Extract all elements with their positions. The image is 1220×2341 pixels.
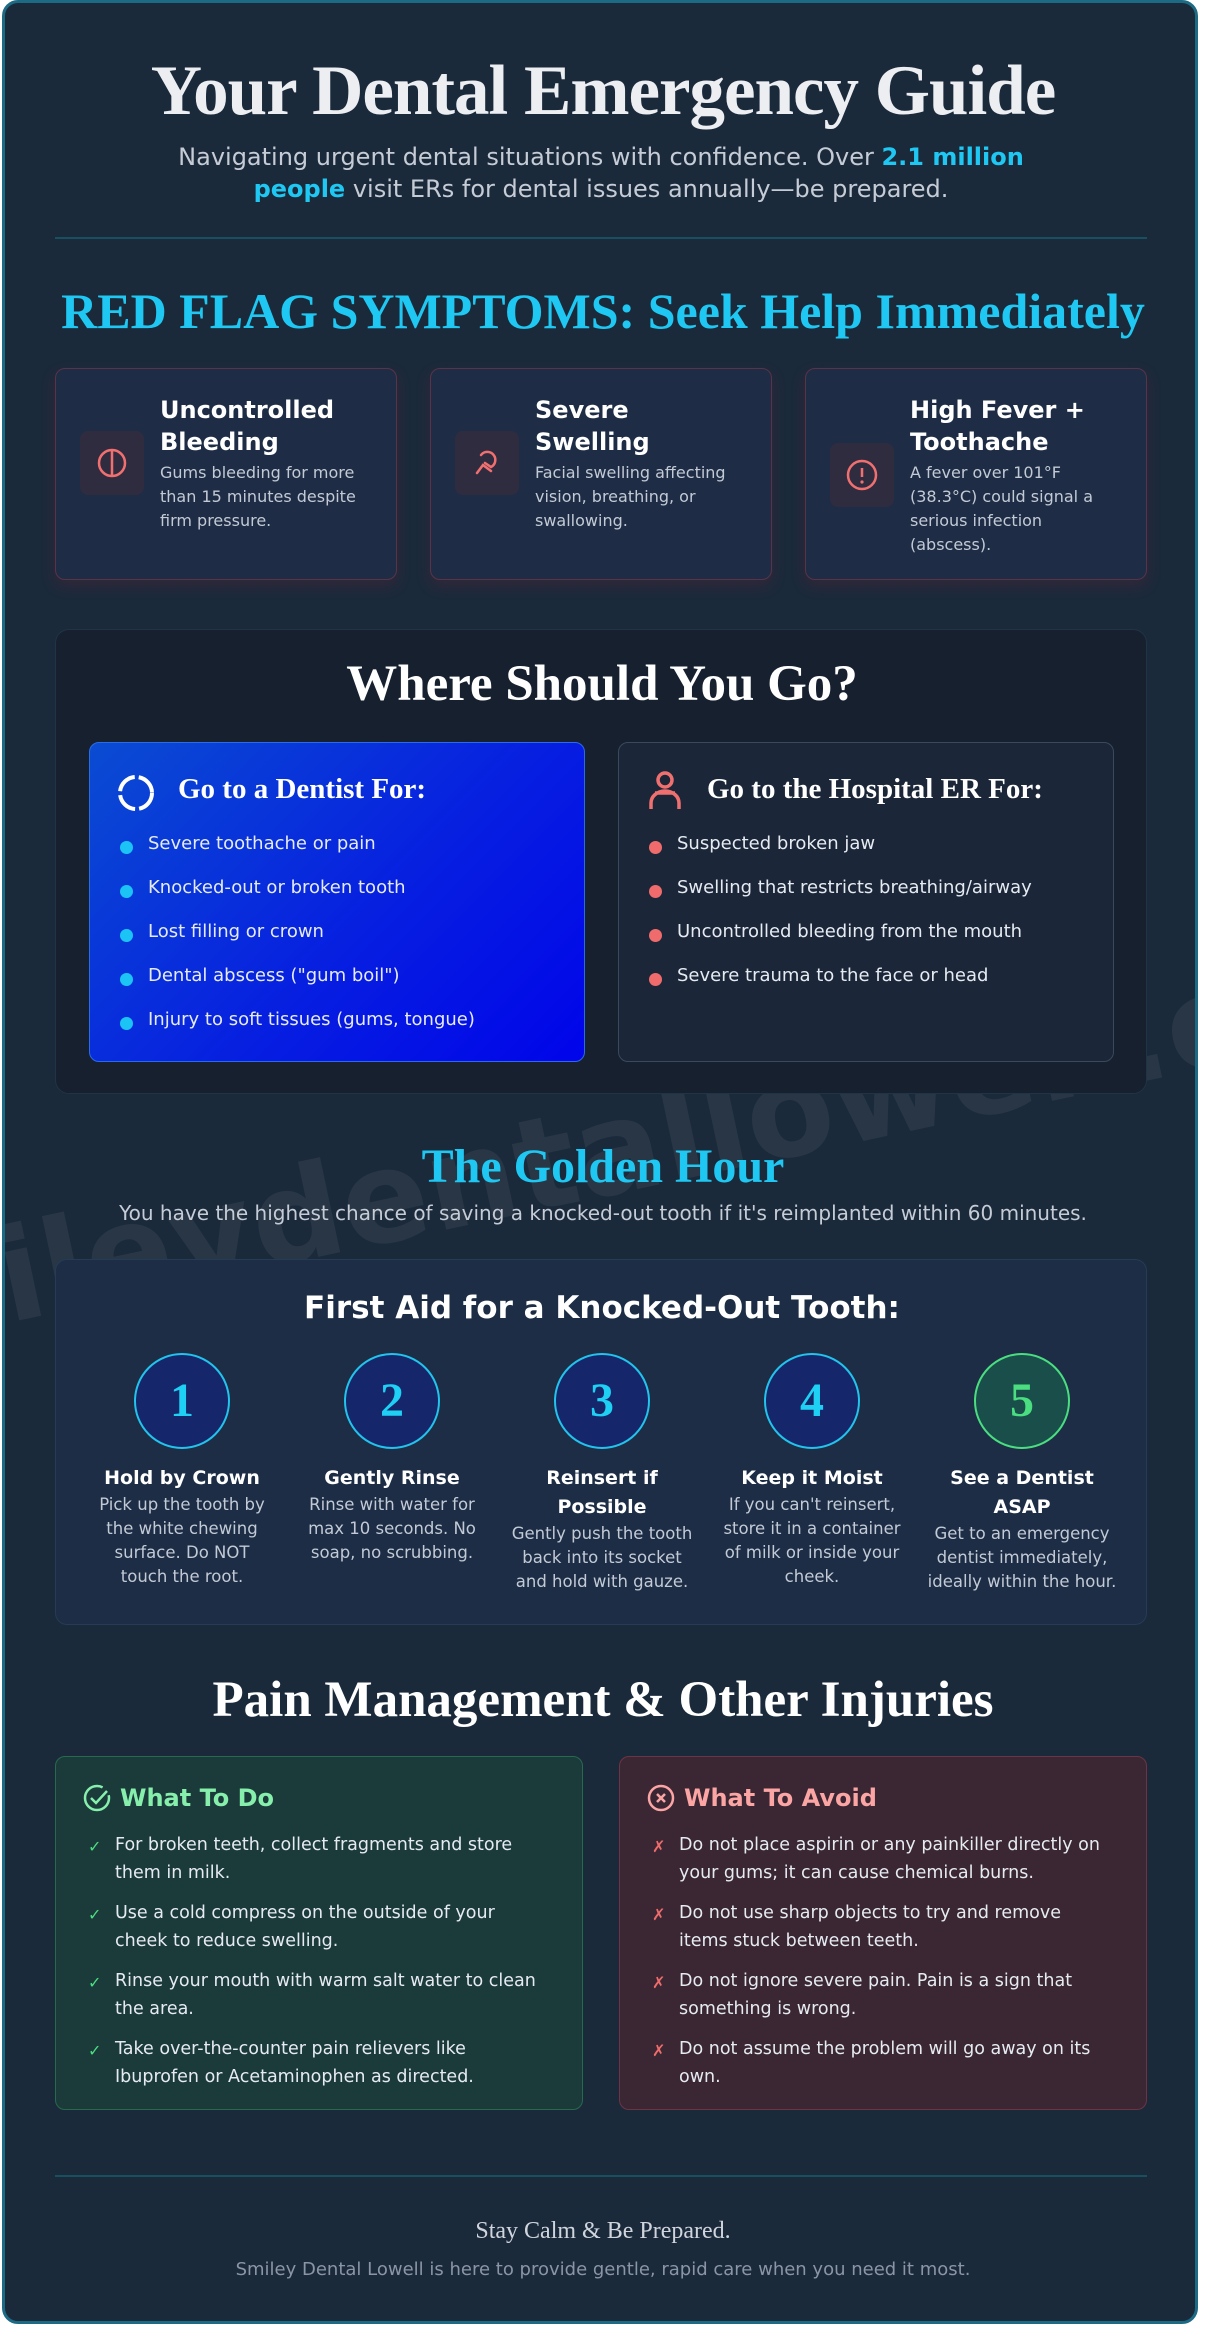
title: Your Dental Emergency Guide bbox=[151, 52, 1055, 130]
panel: what to avoid bbox=[619, 1756, 1147, 2110]
step 1: Hold by Crown bbox=[104, 1467, 260, 1489]
panel: first aid bbox=[55, 1259, 1147, 1625]
panel: what to avoid: Do not use sharp objects to try and remove items stuck between teeth. bbox=[679, 1903, 1061, 1951]
icon: bleeding bbox=[80, 431, 144, 495]
panel: dentist: Dental abscess ("gum boil") bbox=[148, 965, 400, 986]
icon: fever alert bbox=[830, 443, 894, 507]
panel: what to do: ✓ bbox=[88, 1905, 101, 1924]
card: severe swelling: Severe bbox=[535, 396, 629, 424]
heading: golden hour: The Golden Hour bbox=[422, 1140, 784, 1193]
step 4 bbox=[723, 1353, 901, 1586]
step 2: Gently Rinse bbox=[324, 1467, 460, 1489]
panel: hospital: Go to the Hospital ER For: bbox=[707, 773, 1043, 805]
text: golden hour: You have the highest chance of saving a knocked-out tooth if it's reimplanted within 60 minutes. bbox=[119, 1201, 1087, 1225]
panel: dentist: Injury to soft tissues (gums, tongue) bbox=[148, 1009, 475, 1030]
card: high fever: Toothache bbox=[910, 428, 1049, 456]
card: severe swelling bbox=[430, 368, 772, 580]
panel: hospital: Swelling that restricts breathing/airway bbox=[677, 877, 1032, 898]
panel: what to avoid: What To Avoid bbox=[684, 1784, 877, 1812]
card: high fever: High Fever + bbox=[910, 396, 1085, 424]
panel: where should you go bbox=[55, 629, 1147, 1094]
step 3: Reinsert if bbox=[546, 1467, 658, 1489]
step 2 bbox=[308, 1353, 476, 1562]
step 1: 1 bbox=[170, 1374, 194, 1427]
step 4: If you can't reinsert, store it in a container of milk or inside your cheek. bbox=[723, 1495, 901, 1586]
card: high fever: A fever over 101°F (38.3°C) could signal a serious infection (abscess). bbox=[910, 463, 1093, 554]
panel: hospital: Uncontrolled bleeding from the mouth bbox=[677, 921, 1022, 942]
panel: hospital bbox=[618, 742, 1114, 1062]
panel: what to avoid: Do not assume the problem will go away on its own. bbox=[679, 2039, 1090, 2087]
panel: what to avoid: Do not place aspirin or any painkiller directly on your gums; it can cause chemical burns. bbox=[679, 1835, 1100, 1883]
card: uncontrolled bleeding: Bleeding bbox=[160, 428, 279, 456]
panel: dentist: Go to a Dentist For: bbox=[178, 773, 426, 805]
step 4: Keep it Moist bbox=[741, 1467, 883, 1489]
footer tagline: Stay Calm & Be Prepared. bbox=[475, 2218, 731, 2244]
panel: hospital: Suspected broken jaw bbox=[677, 833, 875, 854]
step 5: Get to an emergency dentist immediately, ideally within the hour. bbox=[928, 1524, 1116, 1591]
panel: what to avoid: ✗ bbox=[652, 1905, 665, 1924]
panel: what to do: For broken teeth, collect fragments and store them in milk. bbox=[115, 1835, 512, 1883]
step 2: 2 bbox=[380, 1374, 404, 1427]
step 4: 4 bbox=[800, 1374, 824, 1427]
heading: red flag symptoms: RED FLAG SYMPTOMS: Seek Help Immediately bbox=[61, 283, 1145, 339]
panel: dentist: Knocked-out or broken tooth bbox=[148, 877, 406, 898]
step 3: Possible bbox=[557, 1496, 647, 1518]
heading: First Aid for a Knocked-Out Tooth: bbox=[304, 1290, 900, 1326]
subtitle: Navigating urgent dental situations with confidence. Over 2.1 million people visit ERs for dental issues annually—be prepared. bbox=[178, 143, 1024, 203]
step 2: Rinse with water for max 10 seconds. No soap, no scrubbing. bbox=[308, 1495, 476, 1562]
footer text: Smiley Dental Lowell is here to provide gentle, rapid care when you need it most. bbox=[236, 2259, 970, 2280]
card: uncontrolled bleeding: Uncontrolled bbox=[160, 396, 334, 424]
card: severe swelling: Swelling bbox=[535, 428, 650, 456]
panel: what to avoid: ✗ bbox=[652, 2041, 665, 2060]
panel: what to avoid: ✗ bbox=[652, 1837, 665, 1856]
panel: what to do: ✓ bbox=[88, 2041, 101, 2060]
step 3: Gently push the tooth back into its socket and hold with gauze. bbox=[512, 1524, 692, 1591]
step 3 bbox=[512, 1353, 692, 1591]
step 1: Pick up the tooth by the white chewing surface. Do NOT touch the root. bbox=[99, 1495, 265, 1586]
panel: dentist: Lost filling or crown bbox=[148, 921, 324, 942]
icon: tooth bbox=[118, 775, 154, 811]
step 3: 3 bbox=[590, 1374, 614, 1427]
step 5: ASAP bbox=[993, 1496, 1051, 1518]
step 1 bbox=[99, 1353, 265, 1586]
step 5: See a Dentist bbox=[950, 1467, 1094, 1489]
icon: swelling bbox=[455, 431, 519, 495]
panel: what to do: ✓ bbox=[88, 1973, 101, 1992]
panel: what to do: Use a cold compress on the outside of your cheek to reduce swelling. bbox=[115, 1903, 495, 1951]
panel: what to do: What To Do bbox=[120, 1784, 274, 1812]
panel: what to do: ✓ bbox=[88, 1837, 101, 1856]
panel: hospital: Severe trauma to the face or head bbox=[677, 965, 988, 986]
heading: pain management: Pain Management & Other Injuries bbox=[212, 1672, 994, 1728]
panel: what to do: Rinse your mouth with warm salt water to clean the area. bbox=[115, 1971, 536, 2019]
card: uncontrolled bleeding: Gums bleeding for more than 15 minutes despite firm pressure. bbox=[160, 463, 356, 530]
panel: what to avoid: Do not ignore severe pain. Pain is a sign that something is wrong. bbox=[679, 1971, 1072, 2019]
panel: what to do bbox=[55, 1756, 583, 2110]
panel: dentist bbox=[89, 742, 585, 1062]
card: severe swelling: Facial swelling affecting vision, breathing, or swallowing. bbox=[535, 463, 726, 530]
icon: person bbox=[649, 771, 681, 809]
panel: what to avoid: ✗ bbox=[652, 1973, 665, 1992]
card: high fever bbox=[805, 368, 1147, 580]
heading: Where Should You Go? bbox=[346, 656, 858, 712]
panel: dentist: Severe toothache or pain bbox=[148, 833, 376, 854]
step 5 bbox=[928, 1353, 1116, 1591]
panel: what to do: Take over-the-counter pain relievers like Ibuprofen or Acetaminophen as directed. bbox=[115, 2039, 474, 2087]
step 5: 5 bbox=[1010, 1374, 1034, 1427]
card: uncontrolled bleeding bbox=[55, 368, 397, 580]
